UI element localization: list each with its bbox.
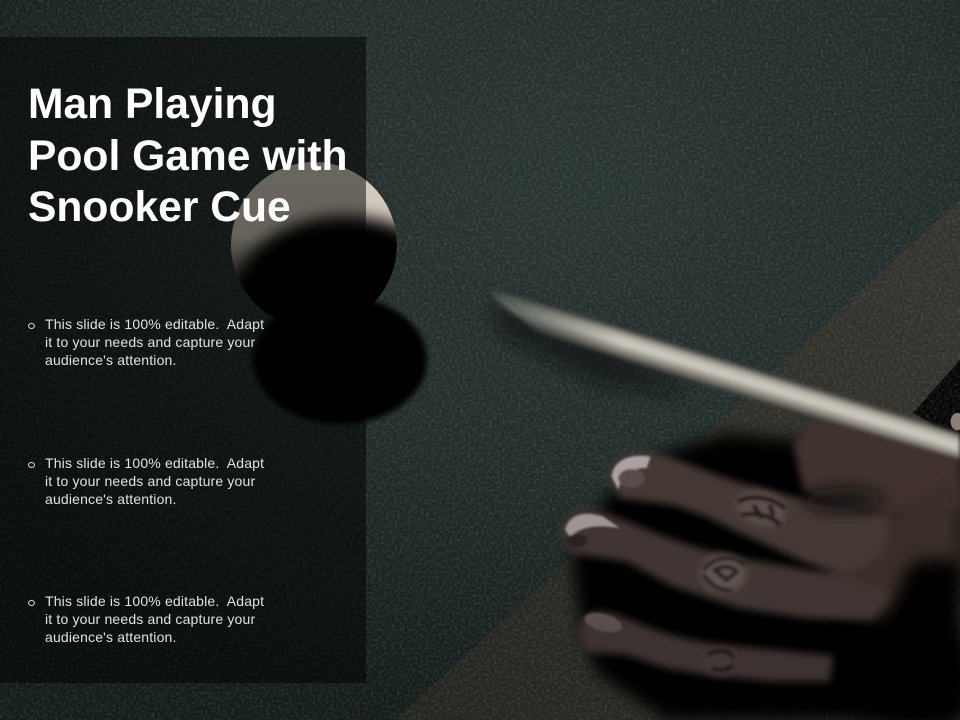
table rail — [395, 200, 960, 720]
ball shadow — [253, 296, 427, 424]
fingernails — [565, 456, 651, 636]
palm shadows — [803, 488, 960, 720]
knuckles — [701, 486, 790, 675]
ring finger — [578, 612, 833, 682]
dark text panel — [0, 37, 366, 683]
title — [28, 80, 348, 231]
cue shadow — [490, 300, 690, 395]
bullet 2: This slide is 100% editable. Adapt it to your needs and capture your audience's attention. — [45, 455, 264, 507]
cue ball — [231, 162, 397, 318]
title: Pool Game with — [28, 132, 348, 180]
hand — [560, 413, 960, 720]
title: Man Playing — [28, 80, 277, 128]
index finger — [608, 452, 890, 575]
thumb — [793, 418, 960, 517]
middle finger — [560, 509, 890, 620]
hand dark base — [572, 433, 960, 720]
back of hand — [807, 477, 960, 620]
snooker cue — [486, 286, 960, 459]
title: Snooker Cue — [28, 183, 291, 231]
bullet 1: This slide is 100% editable. Adapt it to your needs and capture your audience's attention. — [45, 316, 264, 368]
thumb tip — [951, 413, 960, 430]
bullet 3: This slide is 100% editable. Adapt it to your needs and capture your audience's attention. — [45, 593, 264, 645]
